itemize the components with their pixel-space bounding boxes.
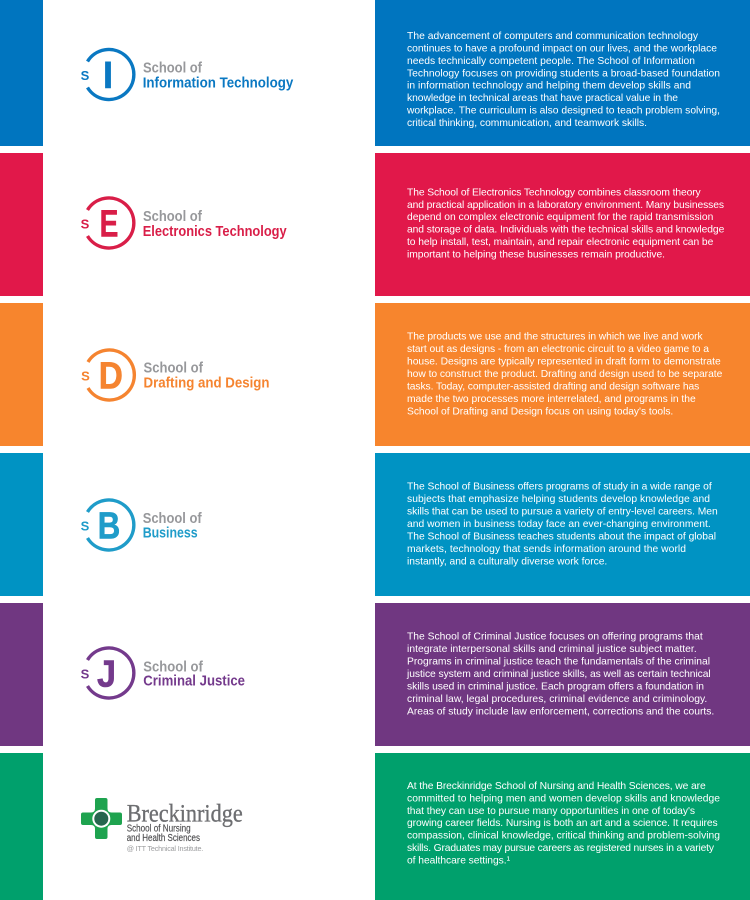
text block: information technology: workplace. The curriculum is also designed to teach problem solving, <box>406 106 720 117</box>
logo icon: business: S <box>81 518 90 534</box>
text block: nursing and health sciences: of healthcare settings.¹ <box>407 855 511 866</box>
logo icon: criminal justice: S <box>81 666 90 682</box>
text block: business: skills that can be used to pursue a variety of entry-level careers. Men <box>407 507 718 518</box>
panel: criminal justice <box>0 603 750 746</box>
text block: business <box>407 482 718 567</box>
logo icon: green cross <box>81 798 122 839</box>
heading: school of drafting and design: School of <box>144 361 203 377</box>
text block: business: subjects that emphasize helping students develop knowledge and <box>407 494 710 505</box>
logo icon: business <box>81 500 134 550</box>
text block: drafting and design: house. Designs are typically represented in draft form to demonstrate <box>407 357 721 368</box>
text block: business: The School of Business offers programs of study in a wide range of <box>407 482 712 493</box>
logo icon: electronics technology: E <box>100 204 118 246</box>
logo icon: business: B <box>98 506 120 547</box>
text block: electronics technology <box>407 187 725 261</box>
text block: criminal justice <box>406 632 714 717</box>
heading: school of electronics technology: School of <box>143 209 202 225</box>
heading: school of business: School of <box>143 511 202 527</box>
heading: school of information technology: School of <box>143 61 202 77</box>
logo wordmark: breckinridge: Breckinridge <box>127 801 243 828</box>
text block: information technology: continues to have a profound impact on our lives, and the workplace <box>407 43 717 54</box>
logo wordmark: breckinridge: @ ITT Technical Institute. <box>127 844 203 853</box>
text block: information technology: critical thinking, communication, and teamwork skills. <box>407 118 647 129</box>
text block: drafting and design: start out as designs - from an electronic circuit to a video game to a <box>407 344 709 355</box>
panel: electronics technology <box>0 153 750 296</box>
text block: information technology: needs technically competent people. The School of Information <box>407 56 695 67</box>
logo wordmark: breckinridge: and Health Sciences <box>127 833 200 844</box>
text block: criminal justice: Programs in criminal justice teach the fundamentals of the criminal <box>407 657 710 668</box>
logo icon: electronics technology <box>81 198 134 248</box>
text block: information technology: The advancement of computers and communication technology <box>407 31 699 42</box>
logo icon: drafting and design: D <box>99 355 123 397</box>
logo icon: information technology: S <box>81 68 90 83</box>
text block: information technology <box>406 31 720 129</box>
text block: electronics technology: to help install, test, maintain, and repair electronic equipment can be <box>407 237 714 248</box>
text block: business: instantly, and a culturally diverse work force. <box>407 556 607 567</box>
text block: criminal justice: The School of Criminal Justice focuses on offering programs that <box>407 632 703 643</box>
text block: criminal justice: Areas of study include law enforcement, corrections and the courts. <box>407 706 714 717</box>
panel: nursing and health sciences <box>0 753 750 900</box>
logo icon: drafting and design: S <box>81 368 90 384</box>
heading: school of criminal justice: School of <box>143 659 203 675</box>
heading: school of electronics technology <box>143 209 287 240</box>
logo icon: electronics technology: S <box>81 216 90 232</box>
text block: information technology: knowledge in technical areas that have practical value in the <box>407 93 678 104</box>
panel: business <box>0 453 750 596</box>
heading: school of information technology: Information Technology <box>143 76 294 92</box>
logo icon: drafting and design <box>81 350 134 400</box>
logo wordmark: breckinridge: School of Nursing <box>127 824 191 835</box>
logo icon: criminal justice <box>81 648 134 698</box>
text block: electronics technology: and practical application in a laboratory environment. Many businesses <box>407 200 724 211</box>
text block: electronics technology: and storage of data. Individuals with the technical skills and knowledge <box>407 225 725 236</box>
text block: drafting and design: how to construct the product. Drafting and design used to be separate <box>407 369 723 380</box>
logo icon: information technology: I <box>103 53 113 96</box>
text block: information technology: in information technology and helping them develop skills and <box>407 81 691 92</box>
heading: school of criminal justice: Criminal Justice <box>143 673 245 689</box>
heading: school of business <box>143 511 202 542</box>
text block: criminal justice: integrate interpersonal skills and criminal justice subject matter. <box>407 644 697 655</box>
text block: business: The School of Business teaches students about the impact of global <box>407 531 716 542</box>
text block: drafting and design: The products we use and the structures in which we live and work <box>407 332 704 343</box>
text block: nursing and health sciences: compassion, clinical knowledge, critical thinking and problem-solving <box>407 831 720 842</box>
text block: business: and women in business today face an ever-changing environment. <box>407 519 711 530</box>
text block: electronics technology: depend on complex electronic equipment for the rapid transmission <box>407 212 714 223</box>
text block: nursing and health sciences: At the Breckinridge School of Nursing and Health Sciences, we are <box>407 781 706 792</box>
heading: school of drafting and design: Drafting and Design <box>144 376 270 392</box>
text block: drafting and design: made the two processes more interrelated, and programs in the <box>407 394 696 405</box>
heading: school of information technology <box>143 61 294 92</box>
panel: drafting and design <box>0 303 750 446</box>
text block: nursing and health sciences: that they can use to pursue many opportunities in one of today's <box>407 806 695 817</box>
text block: information technology: Technology focuses on providing students a broad-based foundation <box>407 68 720 79</box>
text block: criminal justice: skills used in criminal justice. Each program offers a foundation in <box>407 681 704 692</box>
heading: school of electronics technology: Electronics Technology <box>143 224 287 240</box>
text block: drafting and design: tasks. Today, computer-assisted drafting and design software has <box>407 381 699 392</box>
text block: electronics technology: The School of Electronics Technology combines classroom theory <box>407 187 702 198</box>
text block: criminal justice: criminal law, legal procedures, criminal evidence and criminology. <box>407 694 707 705</box>
heading: school of drafting and design <box>144 361 270 392</box>
panel: information technology <box>0 0 750 146</box>
text block: electronics technology: important to helping these businesses remain productive. <box>407 250 665 261</box>
text block: nursing and health sciences: growing career fields. Nursing is both an art and a science. It requires <box>407 818 718 829</box>
text block: nursing and health sciences: skills. Graduates may pursue careers as registered nurses in a variety <box>407 843 715 854</box>
text block: criminal justice: justice system and criminal justice skills, as well as certain technical <box>406 669 711 680</box>
text block: business: markets, technology that sends information around the world <box>407 544 686 555</box>
text block: nursing and health sciences <box>407 781 720 866</box>
heading: school of criminal justice <box>143 659 245 689</box>
logo icon: information technology <box>81 50 134 100</box>
heading: school of business: Business <box>143 526 198 542</box>
text block: nursing and health sciences: committed to helping men and women develop skills and knowledge <box>407 793 720 804</box>
text block: drafting and design <box>407 332 723 417</box>
text block: drafting and design: School of Drafting and Design focus on using today's tools. <box>407 406 673 417</box>
logo icon: criminal justice: J <box>97 652 116 695</box>
logo wordmark: breckinridge <box>127 801 243 853</box>
